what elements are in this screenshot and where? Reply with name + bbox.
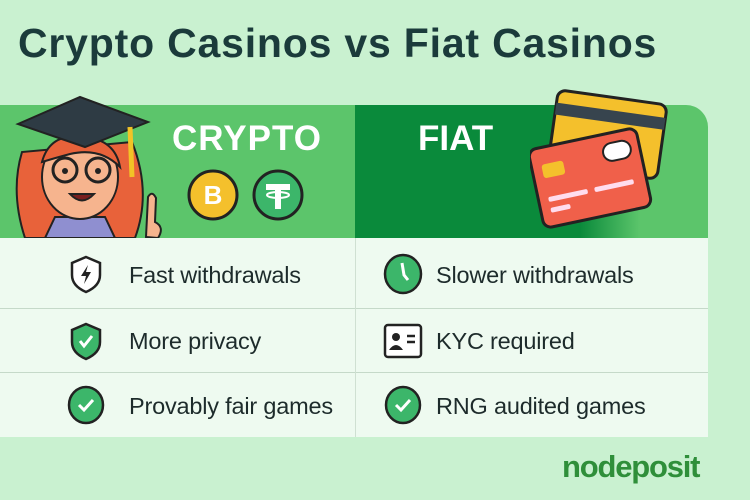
text: provably fair games: Provably fair games — [129, 393, 333, 419]
title: Crypto Casinos vs Fiat Casinos — [18, 20, 657, 66]
text: more privacy: More privacy — [129, 328, 261, 354]
text: slower withdrawals: Slower withdrawals — [436, 262, 634, 288]
text: kyc required: KYC required — [436, 328, 575, 354]
icon: privacy shield — [70, 322, 102, 360]
heading: crypto: CRYPTO — [172, 119, 322, 158]
row 3 — [0, 373, 708, 437]
icon: bitcoin: B — [204, 180, 222, 210]
row 1 — [0, 238, 708, 309]
text: rng audited games: RNG audited games — [436, 393, 646, 419]
icon: lightning shield — [70, 256, 102, 294]
icon: credit cards — [530, 89, 668, 229]
illustration: teacher character — [15, 96, 162, 238]
icon: tether — [252, 170, 304, 220]
header band — [0, 105, 708, 238]
icon: bitcoin — [188, 170, 238, 220]
icon: check — [68, 386, 104, 424]
text: fast withdrawals: Fast withdrawals — [129, 262, 301, 288]
row 2 — [0, 309, 708, 373]
icon: clock — [384, 254, 422, 294]
heading: fiat: FIAT — [418, 119, 493, 158]
icon: check — [384, 386, 422, 424]
icon: id card — [384, 324, 422, 358]
table rows — [0, 238, 708, 437]
logo: nodeposit — [562, 449, 699, 484]
